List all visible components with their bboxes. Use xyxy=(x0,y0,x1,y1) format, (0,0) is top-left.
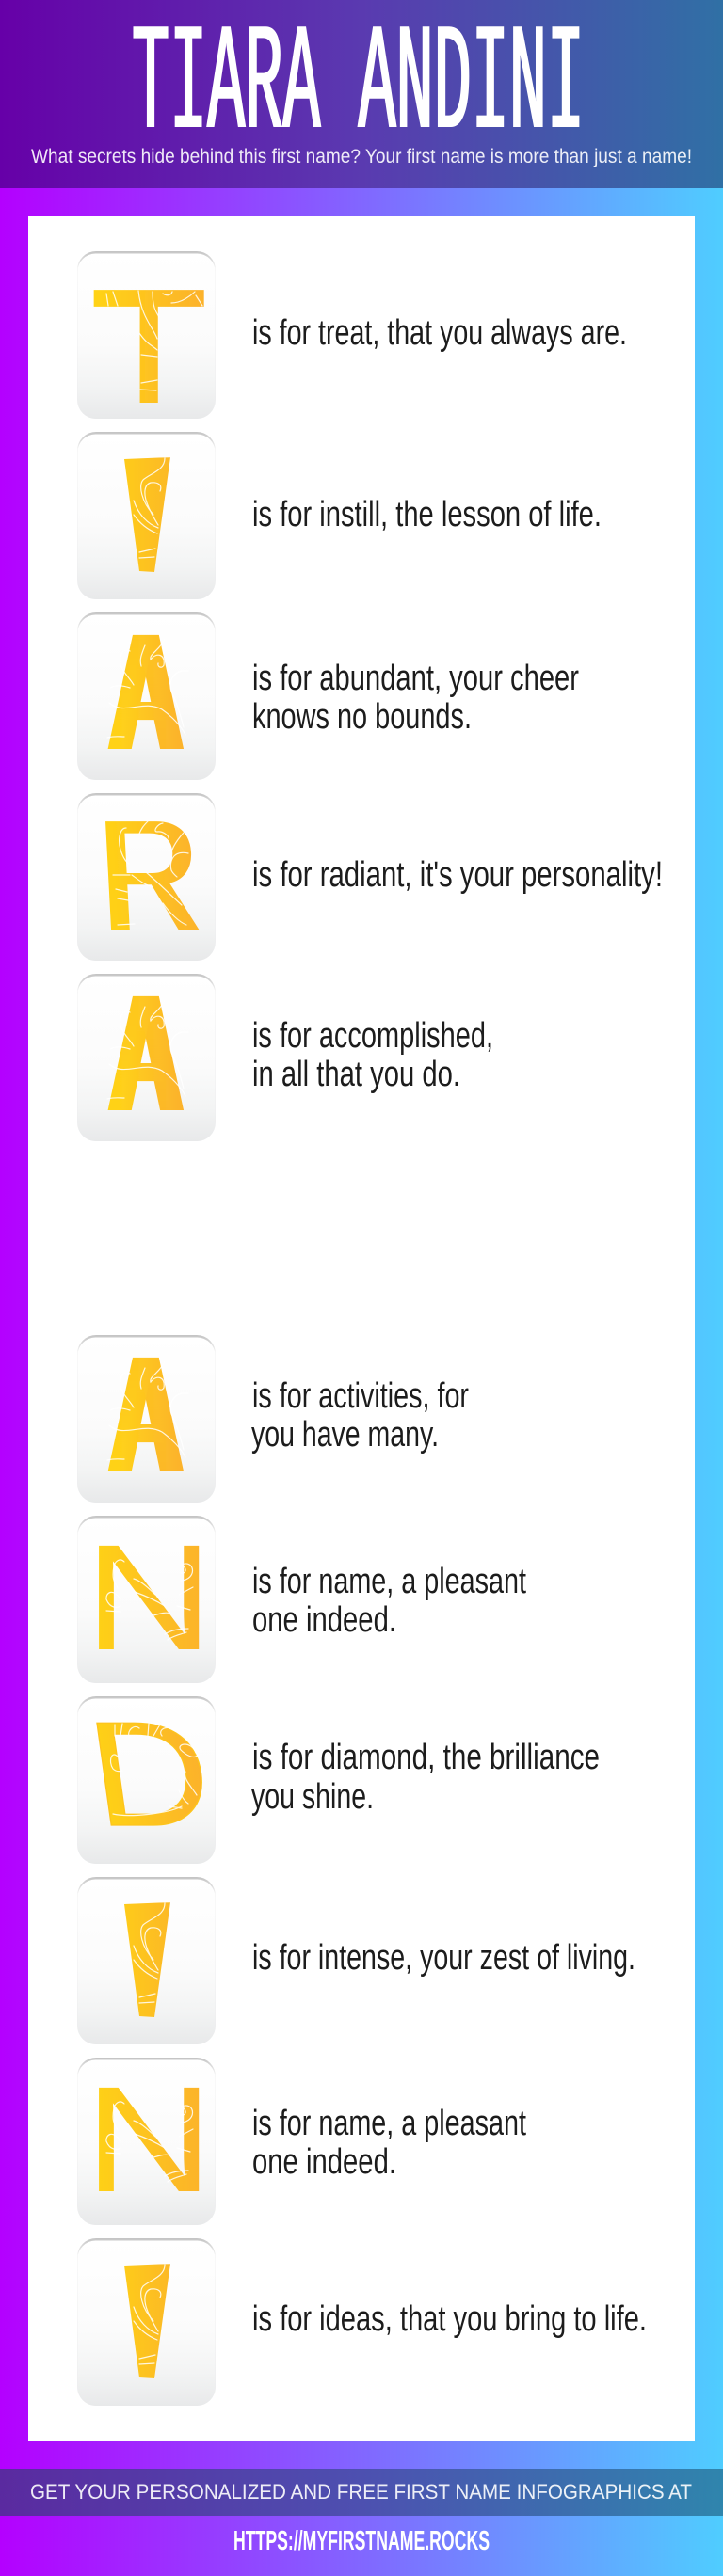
letter R: R xyxy=(95,787,204,963)
tile xyxy=(77,793,216,961)
text: N: is for name, a pleasant xyxy=(252,1562,526,1601)
tile xyxy=(77,974,216,1141)
tile xyxy=(77,1696,216,1864)
letter I: I xyxy=(102,2228,193,2414)
letter A: A xyxy=(110,1322,182,1507)
tile xyxy=(77,1877,216,2044)
text: A: is for abundant, your cheer xyxy=(252,659,579,698)
row: T xyxy=(77,251,216,434)
tile xyxy=(77,2238,216,2406)
tile xyxy=(77,612,216,780)
letter D: D xyxy=(79,1692,220,1857)
row: N xyxy=(77,1514,216,1683)
text: A: knows no bounds. xyxy=(252,697,472,737)
letter T: T xyxy=(89,259,208,434)
text: A surname: you have many. xyxy=(251,1415,439,1455)
row: I second xyxy=(77,1877,216,2044)
tile xyxy=(77,1335,216,1503)
letter I xyxy=(124,2264,170,2378)
tile xyxy=(77,2058,216,2225)
text: A surname: is for activities, for xyxy=(252,1376,469,1416)
row: A surname xyxy=(77,1322,216,1507)
letter N: N xyxy=(85,1514,214,1682)
letter I xyxy=(124,457,170,572)
text: N second: one indeed. xyxy=(252,2142,396,2182)
text: I: is for instill, the lesson of life. xyxy=(252,495,602,534)
letter A: A xyxy=(110,961,182,1146)
letter A: A xyxy=(110,599,182,785)
text: A second: is for accomplished, xyxy=(252,1016,493,1056)
row: D xyxy=(77,1692,220,1864)
letter I: I xyxy=(102,1867,193,2053)
row: A second xyxy=(77,961,216,1146)
footer band xyxy=(0,2469,723,2516)
header band xyxy=(0,0,723,188)
row: A xyxy=(77,599,216,785)
letter N: N xyxy=(85,2056,214,2224)
row: I xyxy=(77,432,216,599)
text: A second: in all that you do. xyxy=(252,1055,460,1094)
row: I third xyxy=(77,2238,216,2406)
text: N second: is for name, a pleasant xyxy=(252,2104,526,2143)
text: N: one indeed. xyxy=(252,1600,396,1640)
letter I xyxy=(124,1902,170,2017)
row: R xyxy=(77,787,216,963)
tile xyxy=(77,432,216,599)
tile xyxy=(77,1516,216,1683)
text: D: you shine. xyxy=(251,1777,374,1817)
letter I: I xyxy=(102,421,193,608)
text: D: is for diamond, the brilliance xyxy=(252,1738,600,1777)
tile xyxy=(77,251,216,419)
footer url: HTTPS://MYFIRSTNAME.ROCKS xyxy=(233,2526,490,2556)
row: N second xyxy=(77,2056,216,2225)
white content panel xyxy=(28,216,695,2441)
